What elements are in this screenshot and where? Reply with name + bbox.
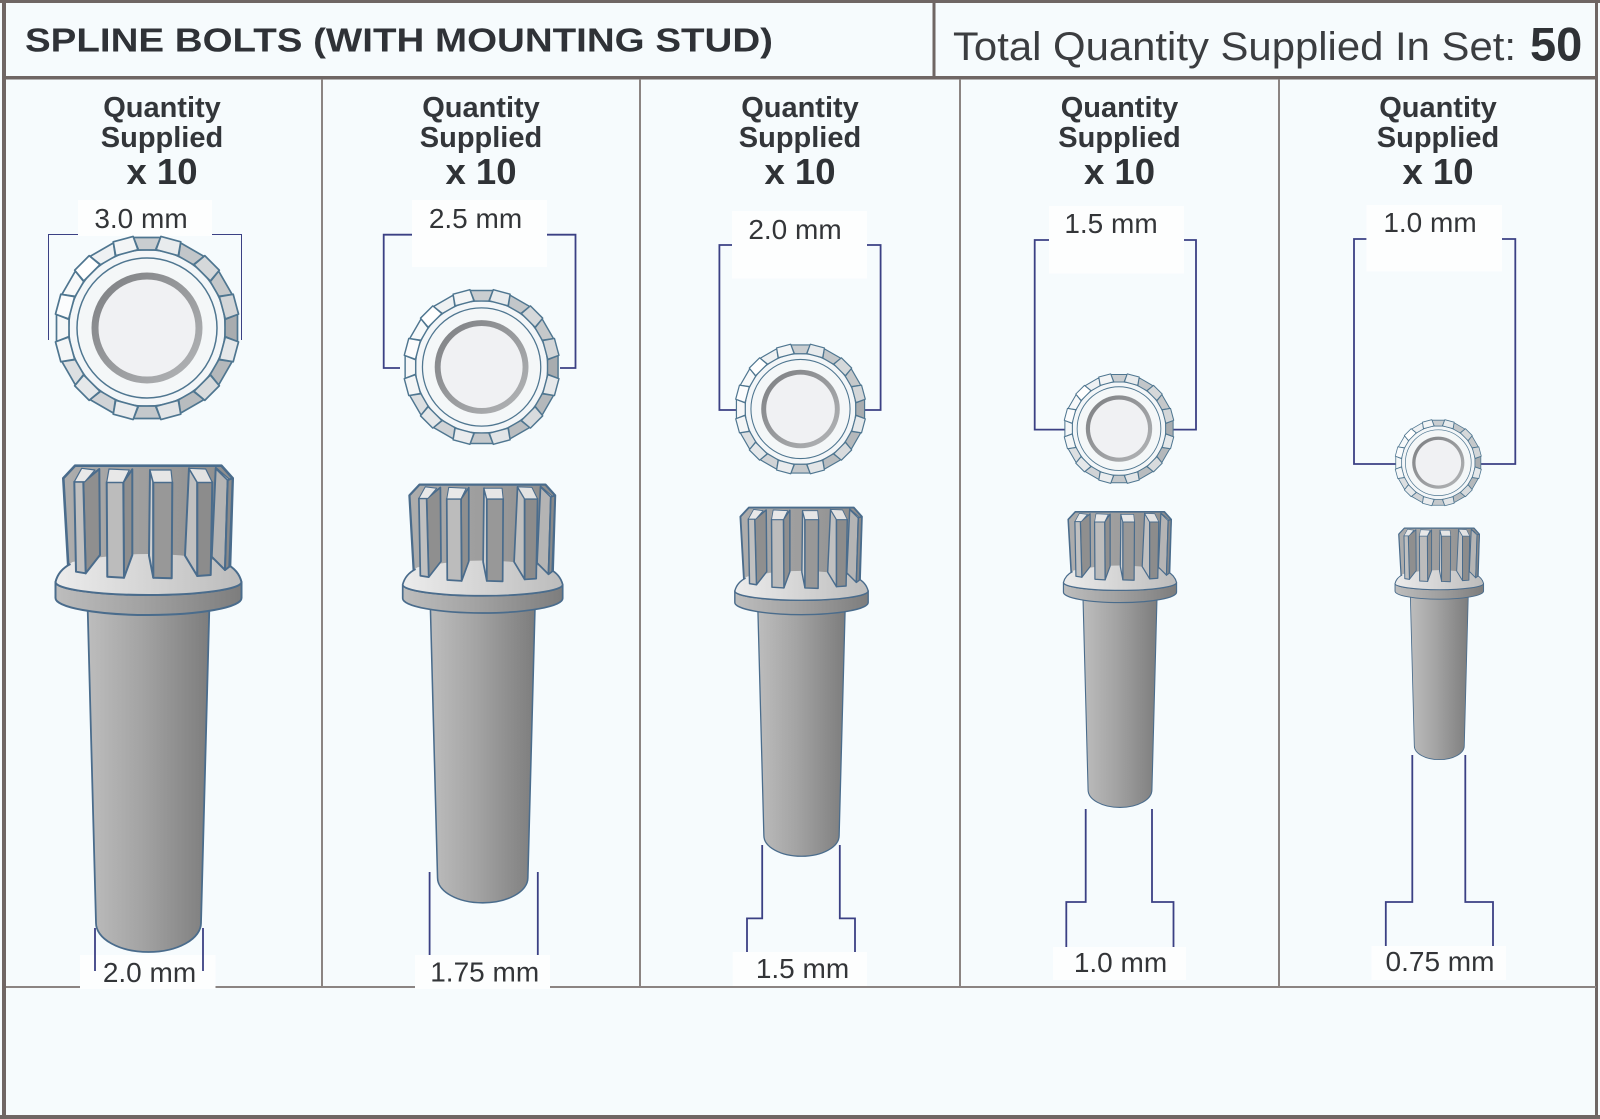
head dimension bracket bbox=[1354, 239, 1515, 464]
icon: side view of bolt bbox=[403, 485, 563, 903]
quantity heading: x 10 bbox=[1084, 151, 1155, 192]
icon: top view of bolt head bbox=[1395, 420, 1481, 506]
head dimension label: 3.0 mm bbox=[94, 203, 188, 234]
head dimension label: 2.0 mm bbox=[748, 214, 842, 245]
head dimension label bbox=[78, 200, 212, 236]
head dimension label bbox=[412, 200, 547, 267]
stud dimension label: 1.0 mm bbox=[1074, 947, 1167, 978]
quantity heading: x 10 bbox=[764, 151, 836, 192]
head dimension bracket bbox=[48, 234, 242, 340]
panel: 1.0 mm spline bolt bbox=[1280, 80, 1595, 986]
stud dimension bracket bbox=[1386, 755, 1493, 946]
quantity heading bbox=[1058, 92, 1181, 192]
icon: side view of bolt bbox=[56, 466, 242, 952]
stud dimension bracket bbox=[430, 872, 538, 955]
quantity heading: Quantity bbox=[422, 92, 540, 124]
stud dimension label bbox=[733, 952, 867, 986]
panel: 2.0 mm spline bolt bbox=[641, 80, 959, 986]
icon: side view of bolt bbox=[1395, 528, 1484, 760]
quantity heading: x 10 bbox=[445, 151, 517, 192]
stud dimension label bbox=[1053, 947, 1186, 980]
quantity heading: Supplied bbox=[739, 122, 861, 154]
quantity heading bbox=[739, 92, 861, 192]
panel: 3.0 mm spline bolt bbox=[6, 80, 321, 989]
quantity heading: Supplied bbox=[1058, 122, 1181, 154]
quantity heading: x 10 bbox=[1402, 151, 1474, 192]
panel: 2.5 mm spline bolt bbox=[323, 80, 639, 989]
quantity heading bbox=[101, 92, 223, 192]
head dimension bracket bbox=[1035, 240, 1196, 430]
total quantity supplied: Total Quantity Supplied In Set: bbox=[953, 25, 1516, 69]
quantity heading: Supplied bbox=[420, 122, 542, 154]
stud dimension bracket bbox=[95, 928, 203, 971]
icon: side view of bolt bbox=[1063, 512, 1177, 807]
head dimension label: 2.5 mm bbox=[429, 203, 522, 234]
icon: top view of bolt head bbox=[735, 344, 866, 474]
icon: top view of bolt head bbox=[1064, 374, 1174, 484]
stud dimension label: 1.75 mm bbox=[430, 956, 539, 988]
icon: top view of bolt head bbox=[404, 289, 559, 445]
quantity heading: Quantity bbox=[103, 92, 221, 124]
quantity heading: Supplied bbox=[101, 122, 223, 154]
quantity heading: Quantity bbox=[741, 92, 859, 124]
head dimension label bbox=[732, 211, 867, 279]
panel: 1.5 mm spline bolt bbox=[961, 80, 1278, 986]
quantity heading bbox=[420, 92, 542, 192]
stud dimension bracket bbox=[1066, 809, 1174, 947]
quantity heading: Quantity bbox=[1061, 92, 1178, 124]
head dimension label: 1.0 mm bbox=[1383, 207, 1477, 238]
stud dimension label: 0.75 mm bbox=[1386, 946, 1494, 977]
head dimension label bbox=[1049, 206, 1184, 274]
quantity heading: Quantity bbox=[1379, 92, 1497, 124]
quantity heading: x 10 bbox=[126, 151, 198, 192]
head dimension label: 1.5 mm bbox=[1064, 208, 1158, 239]
head dimension bracket bbox=[384, 235, 576, 368]
title: SPLINE BOLTS (WITH MOUNTING STUD) bbox=[25, 22, 773, 58]
quantity heading: Supplied bbox=[1377, 122, 1499, 154]
stud dimension label: 2.0 mm bbox=[103, 957, 196, 988]
quantity heading bbox=[1377, 92, 1499, 192]
stud dimension label: 1.5 mm bbox=[756, 953, 849, 984]
stud dimension bracket bbox=[747, 845, 855, 954]
icon: top view of bolt head bbox=[55, 236, 239, 420]
total quantity supplied: 50 bbox=[1530, 18, 1582, 70]
icon: side view of bolt bbox=[735, 508, 868, 856]
head dimension bracket bbox=[719, 245, 881, 410]
stud dimension label bbox=[80, 955, 216, 989]
head dimension label bbox=[1366, 205, 1502, 271]
